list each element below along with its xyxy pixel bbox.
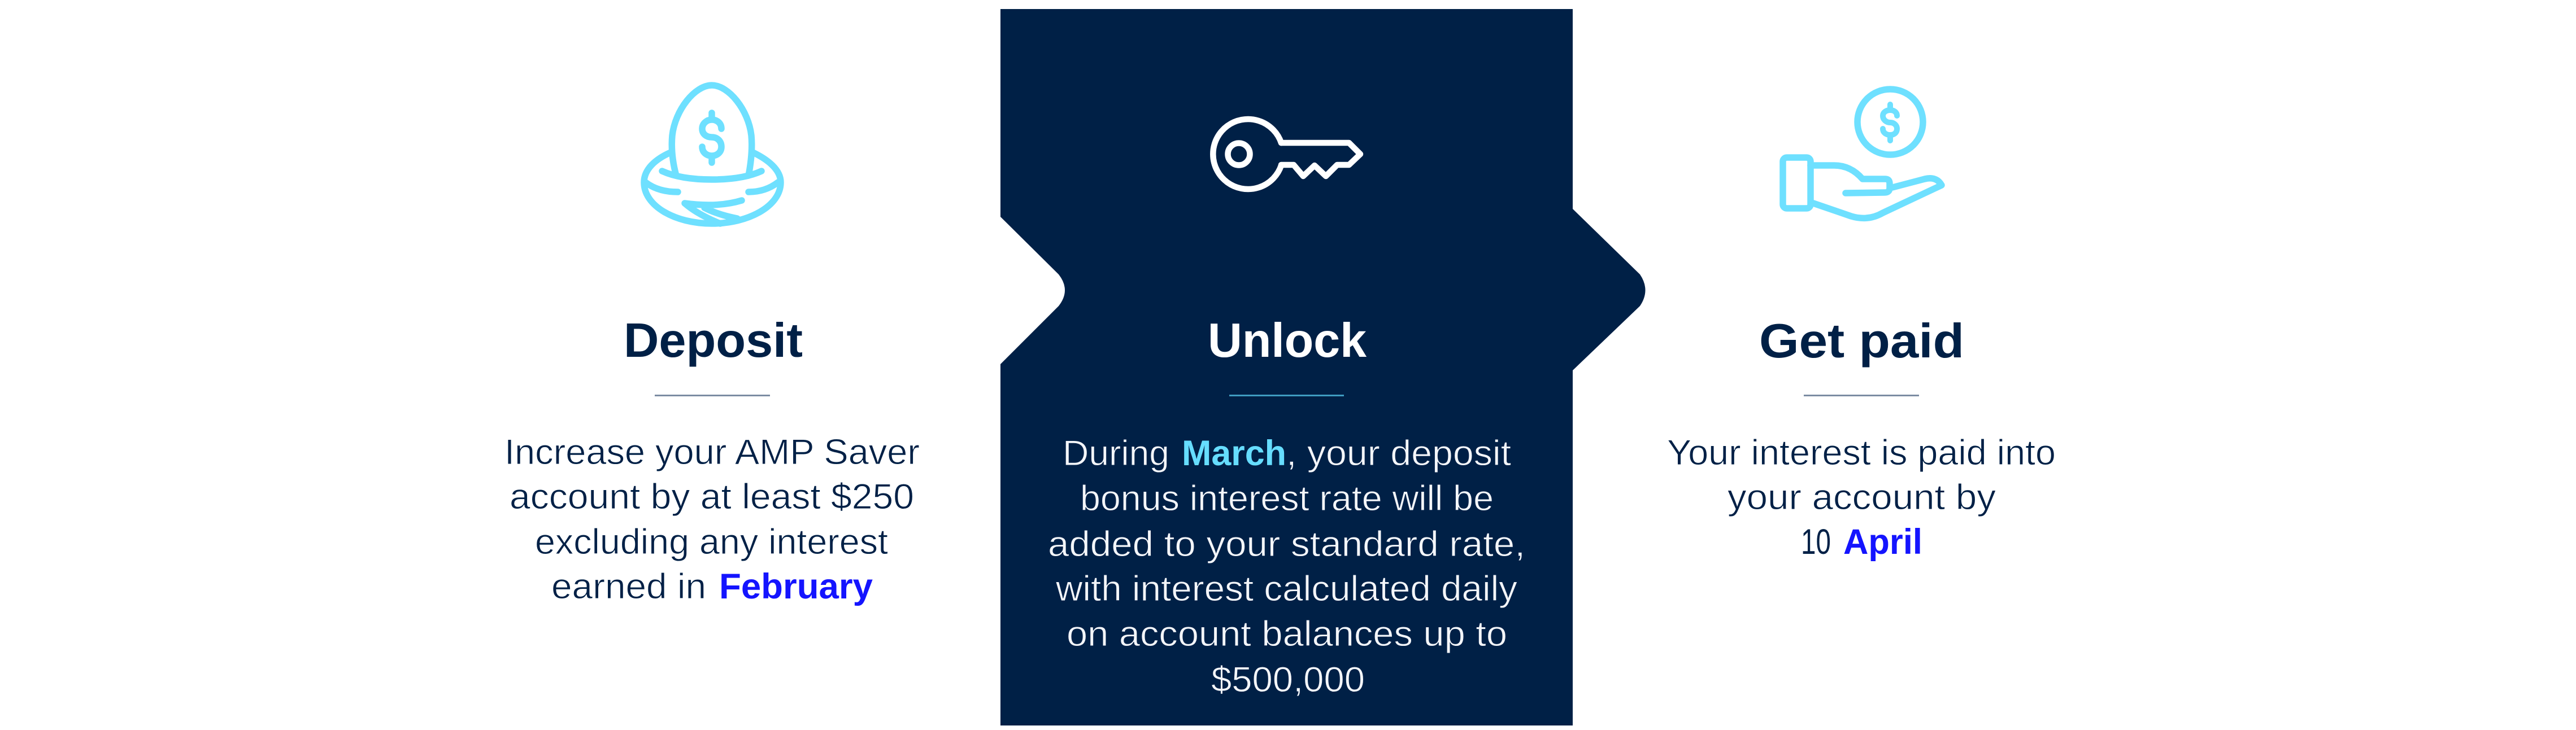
- text block: get paid description: 10: [1801, 522, 1831, 562]
- text block: get paid description: [1667, 433, 2056, 562]
- icon: hand with coin: [1783, 89, 1942, 218]
- text block: get paid description: April: [1843, 522, 1922, 562]
- text block: deposit description: February: [719, 567, 873, 606]
- panel: unlock: [1000, 9, 1645, 725]
- heading: Unlock: Unlock: [1208, 314, 1367, 368]
- icon: nest egg with dollar sign: [644, 85, 781, 224]
- text block: unlock description: [1048, 434, 1525, 700]
- text block: get paid description: Your interest is paid into: [1667, 433, 2056, 473]
- text block: unlock description: , your deposit: [1286, 434, 1512, 473]
- text block: deposit description: earned in: [551, 567, 706, 606]
- text block: unlock description: $500,000: [1211, 660, 1365, 700]
- text block: get paid description: your account by: [1728, 478, 1996, 517]
- text block: deposit description: Increase your AMP Saver: [504, 432, 920, 472]
- text block: unlock description: on account balances up to: [1067, 614, 1507, 654]
- panel: deposit: [504, 85, 920, 606]
- panel: get paid: [1667, 89, 2056, 562]
- text block: unlock description: added to your standard rate,: [1048, 524, 1525, 564]
- heading: Deposit: Deposit: [624, 314, 803, 368]
- icon: key: [1213, 119, 1360, 189]
- text block: unlock description: with interest calculated daily: [1055, 569, 1518, 609]
- text block: deposit description: [504, 432, 920, 606]
- text block: deposit description: excluding any interest: [535, 522, 889, 562]
- text block: unlock description: bonus interest rate will be: [1080, 479, 1494, 518]
- text block: unlock description: March: [1182, 434, 1286, 473]
- text block: unlock description: During: [1063, 434, 1169, 473]
- heading: Get paid: Get paid: [1759, 314, 1964, 368]
- chevron background: [1000, 9, 1645, 725]
- text block: deposit description: account by at least $250: [510, 477, 914, 517]
